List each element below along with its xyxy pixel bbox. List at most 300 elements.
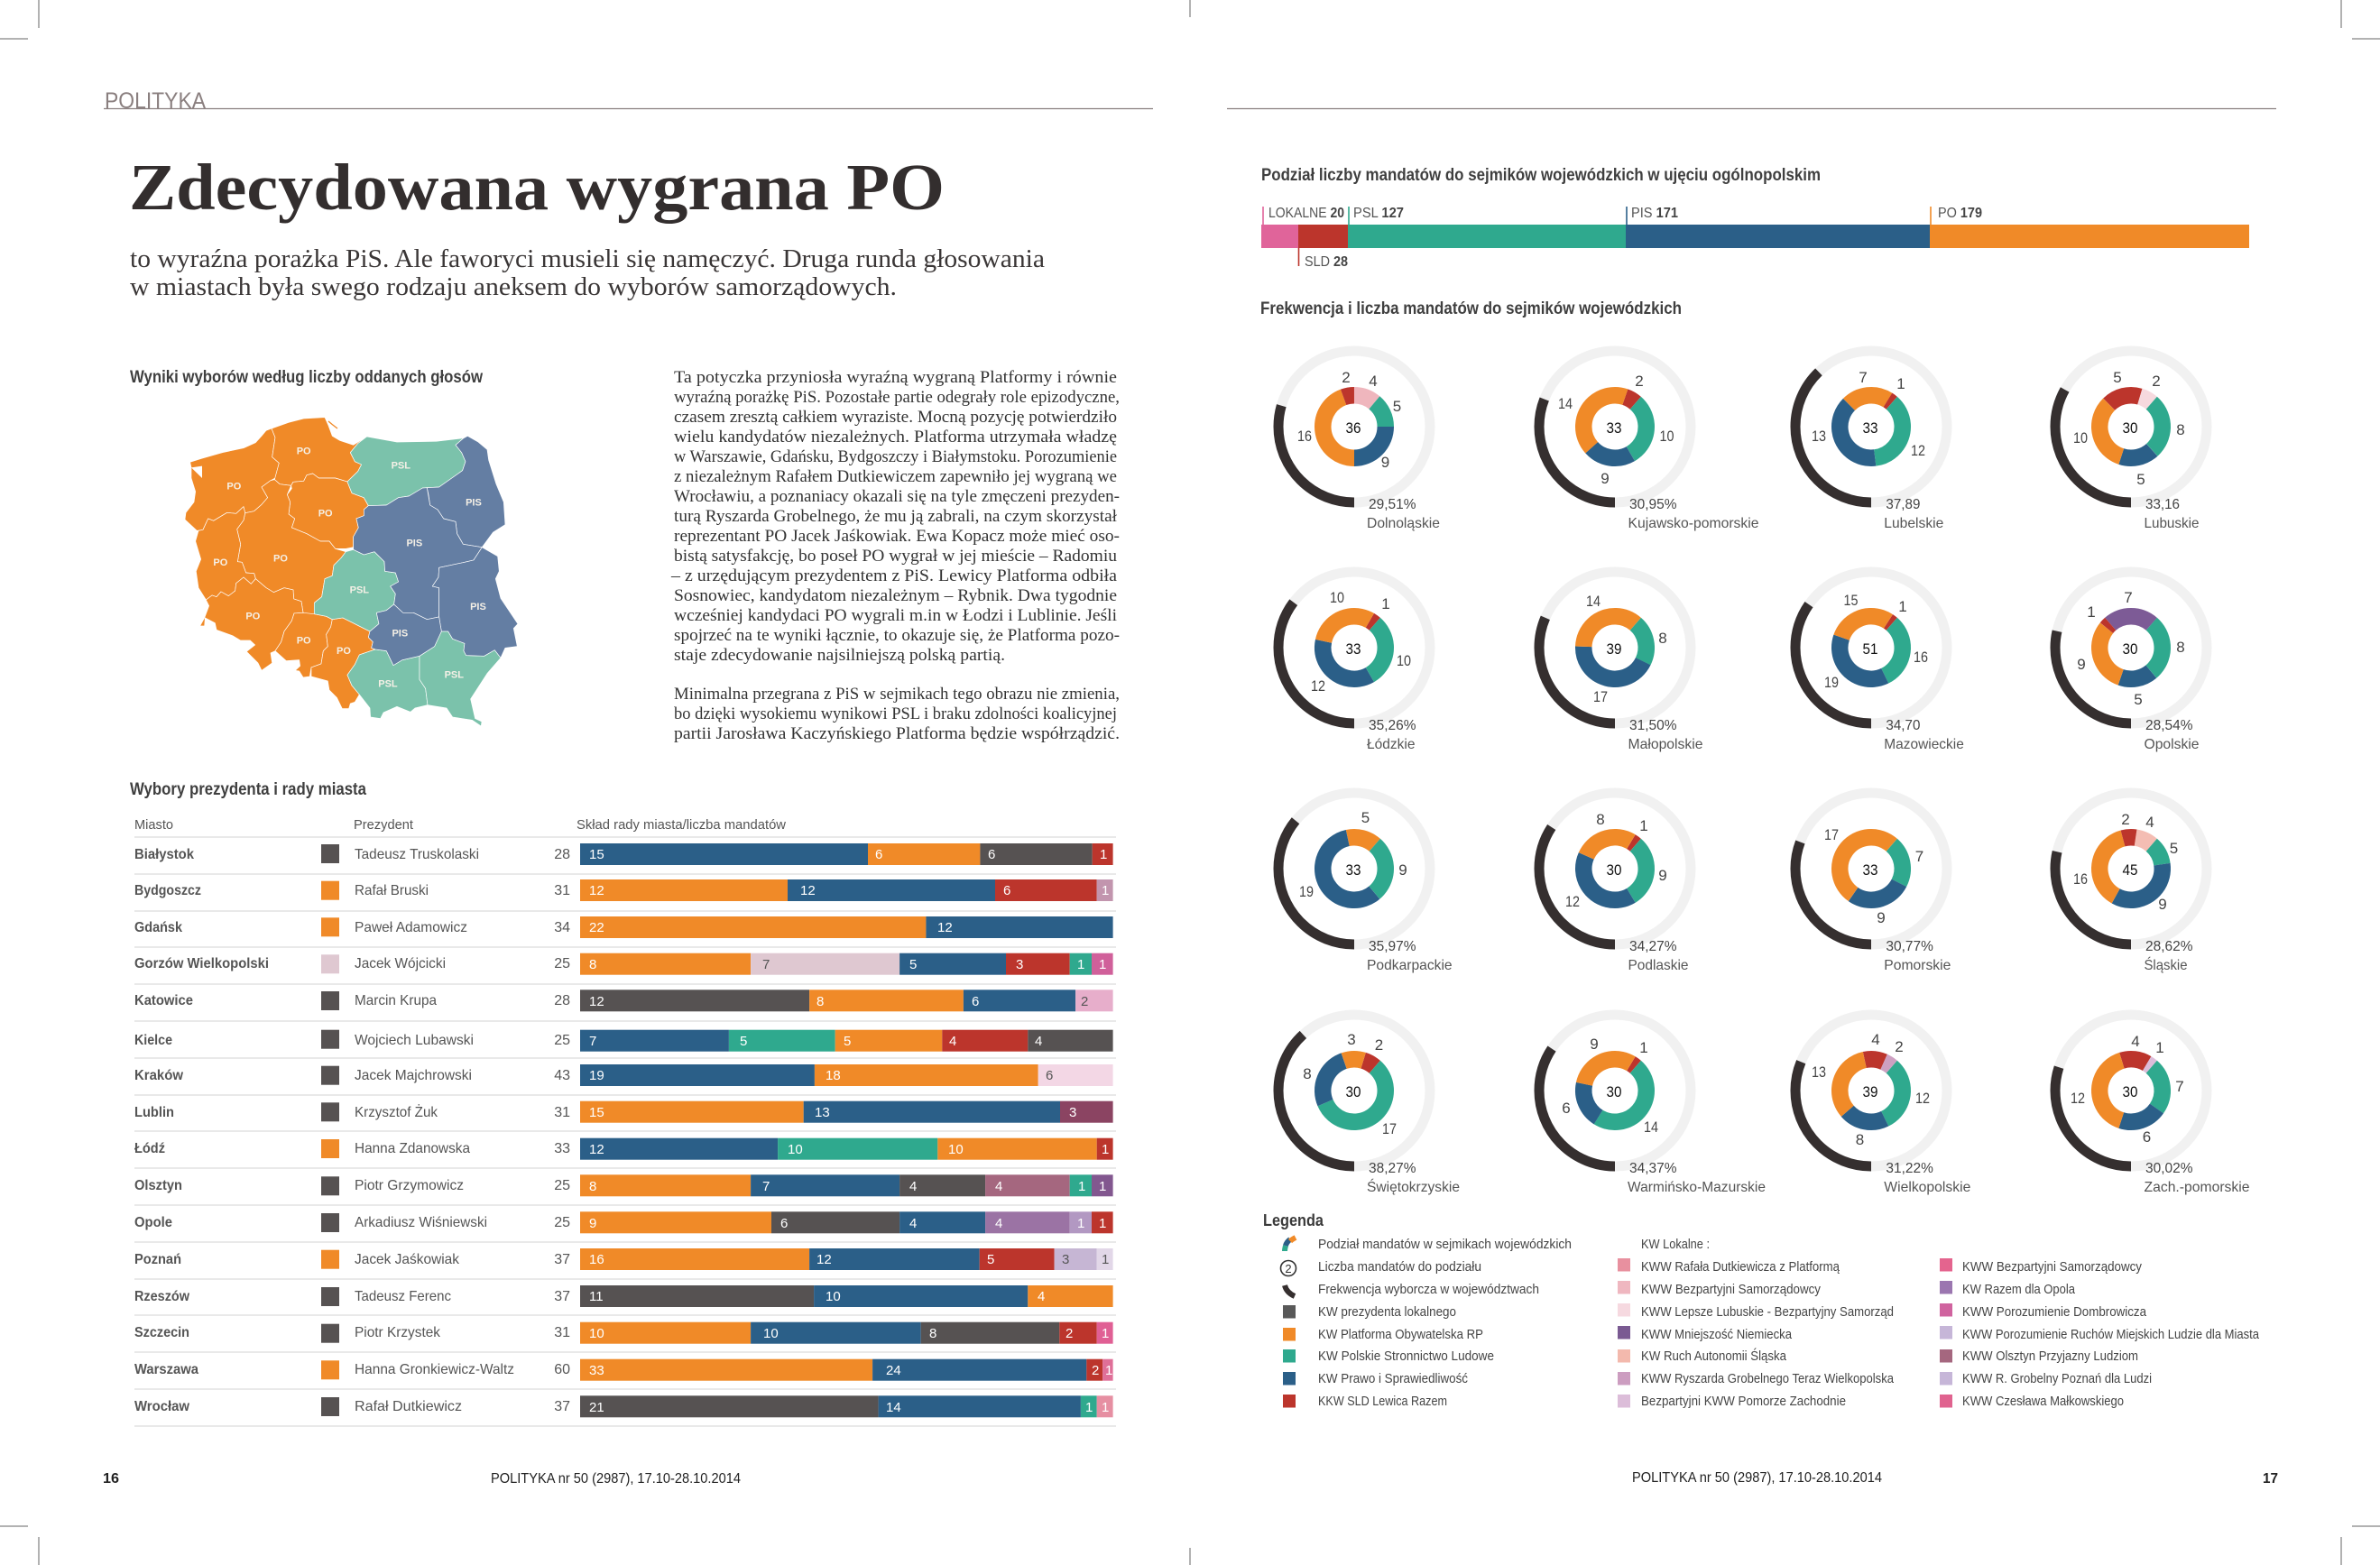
row: Opole: 1 xyxy=(1077,1216,1084,1231)
map of Poland by voivodeship xyxy=(185,418,518,726)
donut: Lubuskie: Lubuskie xyxy=(2144,516,2200,531)
row: Olsztyn: Piotr Grzymowicz xyxy=(355,1178,464,1193)
row: Szczecin xyxy=(134,1322,1113,1344)
row: Olsztyn: 1 xyxy=(1078,1179,1085,1194)
row: Gdańsk: 12 xyxy=(937,920,953,935)
row: Lublin: Krzysztof Żuk xyxy=(355,1103,438,1120)
table: city, president, council seats xyxy=(134,817,1116,1426)
row: Katowice: 8 xyxy=(816,994,824,1009)
row: Szczecin: 10 xyxy=(589,1326,604,1341)
row: Gorzów Wielkopolski: 1 xyxy=(1077,957,1084,972)
legend labels: KW prezydenta lokalnego xyxy=(1318,1304,1456,1320)
article text: wcześniej kandydaci PO wygrali m.in w Łodzi i Lublinie. Jeśli xyxy=(674,606,1117,625)
row: Olsztyn: 4 xyxy=(995,1179,1002,1194)
row: Bydgoszcz: Rafał Bruski xyxy=(355,883,429,898)
donut: Warmińsko-Mazurskie: 14 xyxy=(1644,1119,1658,1136)
row: Poznań: Jacek Jaśkowiak xyxy=(355,1252,460,1267)
row: Opole: 9 xyxy=(589,1216,596,1231)
row: Gdańsk: Gdańsk xyxy=(134,920,182,935)
donut: Podkarpackie: 9 xyxy=(1398,861,1407,879)
donut: Podkarpackie: Podkarpackie xyxy=(1367,958,1453,973)
map of Poland by voivodeship: PIS xyxy=(392,628,408,639)
donut: Zachodniopomorskie: 30 xyxy=(2122,1083,2138,1100)
donut: Podlaskie: 9 xyxy=(1658,867,1667,884)
donut: Opolskie: Opolskie xyxy=(2144,737,2200,752)
row: Rzeszów: 11 xyxy=(589,1289,604,1304)
donut: Pomorskie: 30,77% xyxy=(1886,939,1933,954)
row: Bydgoszcz: 6 xyxy=(1003,883,1010,898)
legend labels: Liczba mandatów do podziału xyxy=(1318,1259,1481,1275)
donut: Lubelskie: Lubelskie xyxy=(1884,516,1943,531)
table: city, president, council seats: Skład rady miasta/liczba mandatów xyxy=(577,817,786,833)
row: Katowice: 12 xyxy=(589,994,604,1009)
donut: Świętokrzyskie: 3 xyxy=(1347,1031,1356,1048)
footer: right page: 17 xyxy=(2263,1471,2278,1487)
row: Kraków: 43 xyxy=(554,1068,570,1083)
donut: Świętokrzyskie: Świętokrzyskie xyxy=(1367,1178,1460,1195)
row: Kielce: 5 xyxy=(844,1034,851,1049)
row: Opole: 4 xyxy=(909,1216,917,1231)
donut: Małopolskie xyxy=(1539,572,1703,752)
row: Olsztyn: 1 xyxy=(1099,1179,1106,1194)
row: Warszawa: 2 xyxy=(1092,1363,1099,1378)
donut: Łódzkie: 1 xyxy=(1381,595,1390,612)
donut: Śląskie: 5 xyxy=(2170,840,2178,857)
row: Kraków: Kraków xyxy=(134,1068,184,1083)
row: Olsztyn: 25 xyxy=(554,1178,570,1193)
row: Lublin: Lublin xyxy=(134,1105,174,1120)
donut: Zachodniopomorskie: 6 xyxy=(2143,1128,2151,1146)
donut: Kujawsko-pomorskie: 2 xyxy=(1635,373,1644,390)
donut: Dolnośląskie: 36 xyxy=(1346,419,1361,437)
article text: bo dzięki wysokiemu wynikowi PSL i braku zdolności koalicyjnej xyxy=(674,704,1117,723)
donut: Zachodniopomorskie: Zach.-pomorskie xyxy=(2144,1180,2250,1195)
donut: Łódzkie xyxy=(1278,572,1430,752)
row: Gorzów Wielkopolski: Gorzów Wielkopolski xyxy=(134,956,269,971)
row: Kraków: 6 xyxy=(1046,1068,1053,1083)
footer: right page xyxy=(1632,1470,2278,1487)
donut: Wielkopolskie: 8 xyxy=(1856,1131,1864,1148)
map of Poland by voivodeship: PO xyxy=(297,446,311,456)
row: Wrocław: Rafał Dutkiewicz xyxy=(355,1399,462,1414)
donut: Świętokrzyskie: 38,27% xyxy=(1369,1161,1416,1176)
donut: Zachodniopomorskie: 7 xyxy=(2175,1078,2184,1095)
donut: Kujawsko-pomorskie xyxy=(1539,351,1759,531)
legend labels: KWW R. Grobelny Poznań dla Ludzi xyxy=(1962,1371,2152,1386)
row: Łódź xyxy=(134,1138,1113,1160)
legend labels: KKW SLD Lewica Razem xyxy=(1318,1394,1447,1409)
donut: Pomorskie xyxy=(1795,793,1951,973)
donut: Małopolskie: Małopolskie xyxy=(1628,737,1703,752)
legend icon: seat count circle xyxy=(1281,1261,1296,1275)
row: Łódź: Łódź xyxy=(134,1141,165,1156)
subtitle xyxy=(130,244,1045,301)
donut: Śląskie: 4 xyxy=(2145,814,2154,831)
donut: Śląskie xyxy=(2055,793,2207,973)
donut: Świętokrzyskie: 30 xyxy=(1346,1083,1361,1100)
stacked bar: seats nationally: PIS 171 xyxy=(1631,206,1678,221)
legend icon: seat count circle: 2 xyxy=(1285,1262,1292,1275)
row: Gdańsk: Paweł Adamowicz xyxy=(355,920,467,935)
article text: Wrocławiu, a poznaniacy okazali się na tyle zmęczeni prezyden- xyxy=(674,487,1120,506)
donut: Mazowieckie: 19 xyxy=(1824,674,1839,691)
row: Katowice: 2 xyxy=(1081,994,1088,1009)
donut: Pomorskie: 33 xyxy=(1862,861,1878,879)
donut: Łódzkie: 12 xyxy=(1311,677,1325,695)
donut: Lubelskie: 13 xyxy=(1812,428,1826,445)
donut: Mazowieckie: 1 xyxy=(1898,598,1907,615)
donut: Małopolskie: 39 xyxy=(1606,640,1622,658)
row: Warszawa: 60 xyxy=(554,1362,570,1377)
donut: Kujawsko-pomorskie: 33 xyxy=(1606,419,1622,437)
table: city, president, council seats: Miasto xyxy=(134,817,173,833)
donut: Małopolskie: 14 xyxy=(1586,593,1601,610)
legend labels xyxy=(1318,1237,2260,1409)
row: Szczecin: 10 xyxy=(763,1326,779,1341)
row: Poznań: 16 xyxy=(589,1252,604,1267)
donut: Zachodniopomorskie: 4 xyxy=(2131,1033,2140,1050)
row: Opole: Opole xyxy=(134,1215,172,1230)
row: Wrocław: 1 xyxy=(1102,1400,1109,1415)
donut: Kujawsko-pomorskie: Kujawsko-pomorskie xyxy=(1628,516,1759,531)
row: Bydgoszcz: 31 xyxy=(554,883,570,898)
row: Szczecin: 31 xyxy=(554,1325,570,1340)
donut: Wielkopolskie: 2 xyxy=(1895,1038,1904,1055)
donut: Opolskie: 7 xyxy=(2124,589,2133,606)
donut: Podlaskie: 1 xyxy=(1639,817,1648,834)
heading: turnout and seats: Frekwencja i liczba mandatów do sejmików wojewódzkich xyxy=(1260,299,1682,318)
row: Kielce xyxy=(134,1030,1113,1052)
donut: Łódzkie: 33 xyxy=(1346,640,1361,658)
donut: Podlaskie: 30 xyxy=(1606,861,1622,879)
donut: Lubuskie: 8 xyxy=(2176,421,2185,438)
donut: Łódzkie: 10 xyxy=(1397,652,1411,669)
article text: turą Ryszarda Grobelnego, że mu ją zabrali, na czym skorzystał xyxy=(674,507,1118,526)
map of Poland by voivodeship: PO xyxy=(297,635,311,646)
row: Wrocław: Wrocław xyxy=(134,1399,190,1414)
donut: Pomorskie: 9 xyxy=(1877,909,1886,926)
row: Olsztyn: 8 xyxy=(589,1179,596,1194)
row: Kraków xyxy=(134,1064,1113,1086)
map of Poland by voivodeship: PO xyxy=(318,509,333,520)
donut: Opolskie: 30 xyxy=(2122,640,2138,658)
donut: Dolnośląskie: 29,51% xyxy=(1369,497,1416,512)
legend labels: KW Platforma Obywatelska RP xyxy=(1318,1327,1483,1342)
row: Kielce: 4 xyxy=(1035,1034,1042,1049)
row: Kielce: Wojciech Lubawski xyxy=(355,1033,474,1048)
subtitle: w miastach była swego rodzaju aneksem do wyborów samorządowych. xyxy=(130,272,897,301)
map of Poland by voivodeship: PO xyxy=(337,646,351,657)
donut: Podlaskie: 12 xyxy=(1565,893,1580,910)
row: Warszawa: 24 xyxy=(886,1363,901,1378)
row: Białystok: 6 xyxy=(988,847,995,862)
legend swatches xyxy=(1283,1258,1952,1407)
legend labels: Frekwencja wyborcza w województwach xyxy=(1318,1282,1539,1297)
row: Bydgoszcz: 1 xyxy=(1102,883,1109,898)
row: Gorzów Wielkopolski: 1 xyxy=(1099,957,1106,972)
row: Łódź: 10 xyxy=(948,1142,964,1157)
row: Kraków: Jacek Majchrowski xyxy=(355,1068,472,1083)
map of Poland by voivodeship: PSL xyxy=(445,670,464,681)
row: Warszawa: Hanna Gronkiewicz-Waltz xyxy=(355,1362,514,1377)
donut: Świętokrzyskie: 17 xyxy=(1382,1120,1397,1137)
donut: Mazowieckie xyxy=(1795,572,1964,752)
row: Rzeszów: 37 xyxy=(554,1289,570,1304)
row: Warszawa: Warszawa xyxy=(134,1362,198,1377)
donut: Mazowieckie: 51 xyxy=(1862,640,1878,658)
row: Kielce: Kielce xyxy=(134,1033,172,1048)
donut: Śląskie: 2 xyxy=(2121,811,2130,828)
donut: Dolnośląskie: 2 xyxy=(1342,369,1351,386)
donut: Podlaskie xyxy=(1539,793,1691,973)
donut: Lubuskie: 5 xyxy=(2136,471,2145,488)
row: Kraków: 18 xyxy=(826,1068,841,1083)
footer: left page xyxy=(103,1471,741,1487)
row: Szczecin: Piotr Krzystek xyxy=(355,1325,441,1340)
stacked bar: seats nationally: PO 179 xyxy=(1938,206,1982,221)
map of Poland by voivodeship: PO xyxy=(226,481,242,492)
row: Łódź: 12 xyxy=(589,1142,604,1157)
footer: right page: POLITYKA nr 50 (2987), 17.10-28.10.2014 xyxy=(1632,1470,1882,1486)
donut: Warmińsko-Mazurskie: 9 xyxy=(1590,1036,1599,1053)
row: Białystok: Tadeusz Truskolaski xyxy=(355,847,479,862)
row: Gdańsk xyxy=(134,916,1113,938)
row: Opole: 25 xyxy=(554,1215,570,1230)
donut: Mazowieckie: 16 xyxy=(1914,649,1928,666)
row: Gorzów Wielkopolski: 3 xyxy=(1016,957,1023,972)
row: Opole: 1 xyxy=(1099,1216,1106,1231)
row: Wrocław: 37 xyxy=(554,1399,570,1414)
row: Katowice: 28 xyxy=(554,993,570,1008)
map of Poland by voivodeship: PIS xyxy=(406,538,422,548)
row: Gorzów Wielkopolski: 25 xyxy=(554,956,570,971)
row: Olsztyn: 7 xyxy=(762,1179,770,1194)
donut: Podkarpackie xyxy=(1278,793,1453,973)
row: Katowice: Katowice xyxy=(134,993,193,1008)
donut: Warmińsko-Mazurskie xyxy=(1539,1015,1766,1195)
donut: Śląskie: 16 xyxy=(2073,870,2088,888)
donut: Lubuskie xyxy=(2055,351,2207,531)
article text: z niezależnym Rafałem Dutkiewiczem zapewniło jej wygraną we xyxy=(674,467,1117,486)
row: Szczecin: 2 xyxy=(1065,1326,1073,1341)
article text: Minimalna przegrana z PiS w sejmikach tego obrazu nie zmienia, xyxy=(674,685,1120,704)
article text: Sosnowiec, kandydatom niezależnym – Rybnik. Dwa tygodnie xyxy=(674,586,1117,605)
row: Warszawa: 1 xyxy=(1105,1363,1112,1378)
legend labels: KWW Mniejszość Niemiecka xyxy=(1641,1327,1793,1342)
section label: POLITYKA: POLITYKA xyxy=(105,88,206,114)
map of Poland by voivodeship: PSL xyxy=(392,461,411,472)
donut: Dolnośląskie: Dolnoląskie xyxy=(1367,516,1440,531)
row: Rzeszów xyxy=(134,1285,1113,1307)
row: Opole xyxy=(134,1211,1113,1233)
row: Poznań: Poznań xyxy=(134,1252,181,1267)
donut: Podkarpackie: 5 xyxy=(1361,809,1370,826)
row: Wrocław: 21 xyxy=(589,1400,604,1415)
title: Zdecydowana wygrana PO xyxy=(129,151,945,224)
article text: w Warszawie, Gdańsku, Bydgoszczy i Białymstoku. Porozumienie xyxy=(674,447,1117,466)
row: Katowice: 6 xyxy=(972,994,979,1009)
donut: Wielkopolskie: 12 xyxy=(1915,1090,1930,1107)
article text: wielu kandydatów niezależnych. Platforma utrzymała władzę xyxy=(674,428,1117,446)
row: Katowice xyxy=(134,990,1113,1011)
article text: czasem zresztą całkiem wyraziste. Mocną pozycję potwierdziło xyxy=(674,408,1117,427)
map heading: Wyniki wyborów według liczby oddanych głosów xyxy=(130,368,483,387)
donut: Lubuskie: 5 xyxy=(2113,369,2122,386)
donut: Dolnośląskie: 16 xyxy=(1297,428,1312,445)
footer: left page: POLITYKA nr 50 (2987), 17.10-28.10.2014 xyxy=(491,1471,741,1487)
row: Białystok: Białystok xyxy=(134,847,194,862)
row: Kielce: 5 xyxy=(740,1034,747,1049)
map of Poland by voivodeship: PO xyxy=(273,553,288,564)
donut: Warmińsko-Mazurskie: 34,37% xyxy=(1629,1161,1676,1176)
row: Łódź: 33 xyxy=(554,1141,570,1156)
row: Szczecin: 8 xyxy=(929,1326,936,1341)
article text: bistą satysfakcję, bo poseł PO wygrał w jej mieście – Radomiu xyxy=(674,547,1118,566)
row: Lublin: 31 xyxy=(554,1105,570,1120)
donut: Opolskie: 1 xyxy=(2087,603,2096,621)
article text: partii Jarosława Kaczyńskiego Platforma będzie współrządzić. xyxy=(674,724,1120,743)
donut: Dolnośląskie: 9 xyxy=(1381,454,1389,471)
donut: Opolskie: 9 xyxy=(2077,656,2086,673)
legend labels: KWW Ryszarda Grobelnego Teraz Wielkopolska xyxy=(1641,1371,1895,1386)
donut: Wielkopolskie: Wielkopolskie xyxy=(1884,1180,1970,1195)
row: Warszawa: 33 xyxy=(589,1363,604,1378)
donut: Śląskie: 45 xyxy=(2122,861,2138,879)
donut: Pomorskie: Pomorskie xyxy=(1884,958,1951,973)
donut: Mazowieckie: 34,70 xyxy=(1886,718,1920,733)
row: Kielce: 7 xyxy=(589,1034,596,1049)
row: Wrocław xyxy=(134,1395,1113,1417)
row: Gorzów Wielkopolski: Jacek Wójcicki xyxy=(355,956,446,971)
donut: Śląskie: 28,62% xyxy=(2145,939,2192,954)
article text: staje zdecydowanie najsilniejszą polską partią. xyxy=(674,646,1005,665)
legend labels: KWW Czesława Małkowskiego xyxy=(1962,1394,2124,1409)
row: Olsztyn: Olsztyn xyxy=(134,1178,182,1193)
donut: Lubelskie: 7 xyxy=(1859,369,1868,386)
donut: Lubuskie: 2 xyxy=(2152,373,2161,390)
donut: Kujawsko-pomorskie: 9 xyxy=(1601,470,1610,487)
heading: national seat split: Podział liczby mandatów do sejmików wojewódzkich w ujęciu ogólnopolskim xyxy=(1261,166,1821,185)
donut: Świętokrzyskie: 8 xyxy=(1303,1065,1312,1082)
donut: Świętokrzyskie: 2 xyxy=(1375,1036,1383,1054)
row: Lublin xyxy=(134,1101,1113,1123)
row: Gdańsk: 22 xyxy=(589,920,604,935)
donut: Warmińsko-Mazurskie: 1 xyxy=(1639,1039,1648,1056)
row: Opole: 6 xyxy=(780,1216,788,1231)
donut: Lubelskie: 33 xyxy=(1862,419,1878,437)
article text: – z urzędującym prezydentem z PiS. Lewicy Platforma odbiła xyxy=(670,566,1118,585)
donut: Małopolskie: 17 xyxy=(1593,688,1608,705)
donut: Opolskie: 5 xyxy=(2134,691,2143,708)
row: Kielce: 25 xyxy=(554,1033,570,1048)
row: Białystok xyxy=(134,843,1113,865)
legend labels: KWW Olsztyn Przyjazny Ludziom xyxy=(1962,1349,2138,1364)
donut: Zachodniopomorskie: 12 xyxy=(2071,1090,2085,1107)
legend labels: KWW Porozumienie Dombrowicza xyxy=(1962,1304,2147,1320)
row: Rzeszów: 4 xyxy=(1038,1289,1045,1304)
donut: Podlaskie: 34,27% xyxy=(1629,939,1676,954)
legend xyxy=(1263,1211,2260,1409)
donut: Kujawsko-pomorskie: 14 xyxy=(1558,395,1573,412)
article text: Ta potyczka przyniosła wyraźną wygraną Platformy i równie xyxy=(674,368,1117,387)
donut: Podkarpackie: 19 xyxy=(1299,883,1314,900)
legend labels: KW Ruch Autonomii Śląska xyxy=(1641,1348,1787,1364)
stacked bar: seats nationally: LOKALNE 20 xyxy=(1268,206,1344,221)
donut: Zachodniopomorskie: 30,02% xyxy=(2145,1161,2192,1176)
row: Poznań: 1 xyxy=(1102,1252,1109,1267)
legend labels: KW Lokalne : xyxy=(1641,1237,1710,1252)
donut: Dolnośląskie: 5 xyxy=(1393,398,1401,415)
row: Opole: 4 xyxy=(995,1216,1002,1231)
row: Bydgoszcz: 12 xyxy=(800,883,816,898)
stacked bar: seats nationally: SLD 28 xyxy=(1305,254,1348,270)
donut: Lubelskie: 12 xyxy=(1911,442,1925,459)
stacked bar: seats nationally xyxy=(1261,206,2249,270)
donut: Mazowieckie: Mazowieckie xyxy=(1884,737,1964,752)
donut: Łódzkie: 35,26% xyxy=(1369,718,1416,733)
row: Gdańsk: 34 xyxy=(554,920,570,935)
donut: Łódzkie: 10 xyxy=(1330,589,1344,606)
row: Poznań xyxy=(134,1248,1113,1270)
row: Rzeszów: 10 xyxy=(826,1289,841,1304)
table: city, president, council seats: Prezydent xyxy=(354,817,414,833)
row: Warszawa xyxy=(134,1359,1113,1381)
donut: Opolskie: 8 xyxy=(2176,639,2185,656)
legend labels: KWW Porozumienie Ruchów Miejskich Ludzie dla Miasta xyxy=(1962,1327,2260,1342)
row: Kraków: 19 xyxy=(589,1068,604,1083)
donut: Pomorskie: 17 xyxy=(1824,826,1839,843)
row: Łódź: Hanna Zdanowska xyxy=(355,1141,470,1156)
donut: Warmińsko-Mazurskie: Warmińsko-Mazurskie xyxy=(1628,1180,1766,1195)
donut: Lubuskie: 30 xyxy=(2122,419,2138,437)
row: Szczecin: 1 xyxy=(1102,1326,1109,1341)
row: Olsztyn: 4 xyxy=(909,1179,917,1194)
donut: Lubelskie: 1 xyxy=(1896,375,1905,392)
donut: Mazowieckie: 15 xyxy=(1844,592,1859,609)
donut: Wielkopolskie: 13 xyxy=(1812,1063,1826,1081)
legend labels: KW Razem dla Opola xyxy=(1962,1282,2076,1297)
donut: Dolnośląskie xyxy=(1278,351,1440,531)
row: Bydgoszcz xyxy=(134,879,1113,901)
map of Poland by voivodeship: PO xyxy=(213,557,228,568)
donut: Podkarpackie: 35,97% xyxy=(1369,939,1416,954)
map of Poland by voivodeship: PO xyxy=(245,611,261,621)
table heading: Wybory prezydenta i rady miasta xyxy=(130,780,366,799)
footer: left page: 16 xyxy=(103,1471,119,1487)
legend labels: KW Polskie Stronnictwo Ludowe xyxy=(1318,1349,1494,1364)
legend labels: KWW Bezpartyjni Samorządowcy xyxy=(1962,1259,2142,1275)
row: Białystok: 6 xyxy=(875,847,882,862)
donut: Warmińsko-Mazurskie: 30 xyxy=(1606,1083,1622,1100)
donut: Wielkopolskie xyxy=(1795,1015,1970,1195)
donut: Łódzkie: Łódzkie xyxy=(1367,737,1416,752)
row: Wrocław: 14 xyxy=(886,1400,901,1415)
legend labels: Podział mandatów w sejmikach wojewódzkich xyxy=(1318,1237,1572,1252)
donut: Dolnośląskie: 4 xyxy=(1369,373,1378,390)
subtitle: to wyraźna porażka PiS. Ale faworyci musieli się namęczyć. Druga runda głosowania xyxy=(130,244,1045,273)
legend labels: Bezpartyjni KWW Pomorze Zachodnie xyxy=(1641,1394,1846,1409)
donut: Pomorskie: 7 xyxy=(1915,848,1923,865)
row: Bydgoszcz: Bydgoszcz xyxy=(134,883,201,898)
legend: Legenda xyxy=(1263,1211,1324,1229)
stacked bar: seats nationally: PSL 127 xyxy=(1353,206,1404,221)
row: Bydgoszcz: 12 xyxy=(589,883,604,898)
row: Białystok: 28 xyxy=(554,847,570,862)
row: Rzeszów: Rzeszów xyxy=(134,1289,189,1304)
map of Poland by voivodeship: PIS xyxy=(466,498,482,509)
donut: Małopolskie: 8 xyxy=(1658,630,1667,647)
donut: Lubelskie: 37,89 xyxy=(1886,497,1920,512)
